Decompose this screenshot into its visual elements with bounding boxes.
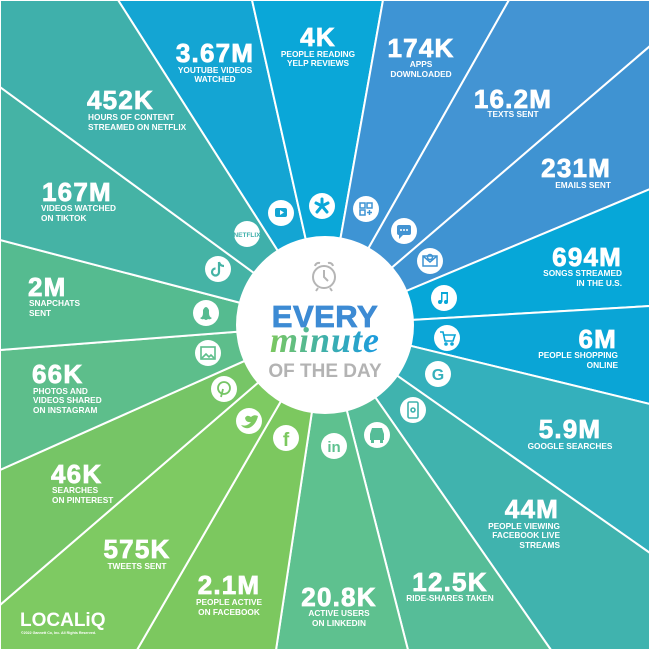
stat: netflix: STREAMED ON NETFLIX	[88, 122, 187, 132]
stat: shopping: 6M	[578, 324, 617, 354]
stat: google	[528, 414, 613, 451]
title: OF THE DAY: OF THE DAY	[268, 361, 382, 382]
icon: email	[423, 254, 437, 266]
stat: instagram: VIDEOS SHARED	[33, 395, 102, 405]
stat: tiktok: 167M	[42, 177, 112, 207]
icon: photo	[201, 347, 215, 359]
stat: netflix: HOURS OF CONTENT	[88, 112, 174, 122]
icons ring	[193, 193, 460, 459]
stat: apps: 174K	[388, 33, 454, 63]
stat: linkedin	[301, 582, 377, 628]
stat: facebook: 2.1M	[198, 570, 260, 600]
stat: apps: DOWNLOADED	[390, 69, 452, 79]
stat: youtube	[176, 38, 254, 84]
stat: apps: APPS	[410, 59, 433, 69]
stat: yelp: 4K	[300, 22, 336, 52]
stat: songs: SONGS STREAMED	[543, 268, 622, 278]
icon: phone	[408, 402, 418, 418]
stat: facebook: PEOPLE ACTIVE	[196, 597, 262, 607]
stat: pinterest: ON PINTEREST	[52, 495, 113, 505]
icon: netflix: NETFLIX	[233, 232, 261, 239]
icon: music	[438, 292, 448, 304]
icon: linkedin: in	[327, 439, 341, 456]
center circle	[236, 236, 414, 414]
stat: snapchat	[28, 272, 80, 318]
stat: yelp	[281, 22, 355, 68]
stat: youtube: 3.67M	[176, 38, 254, 68]
stat: texts: TEXTS SENT	[487, 109, 539, 119]
icon: twitter	[241, 415, 258, 428]
stat: netflix	[87, 85, 187, 132]
stat: youtube: YOUTUBE VIDEOS	[178, 65, 253, 75]
stat: twitter: 575K	[104, 534, 170, 564]
stat: linkedin: 20.8K	[301, 582, 377, 612]
icon: alarm clock	[313, 263, 335, 291]
stat: instagram	[32, 359, 102, 415]
stat: tiktok	[41, 177, 116, 223]
stat: fb live: PEOPLE VIEWING	[488, 521, 560, 531]
stat: google: 5.9M	[539, 414, 601, 444]
stat: google: GOOGLE SEARCHES	[528, 441, 613, 451]
stat: snapchat: SENT	[29, 308, 51, 318]
icon: cart	[440, 332, 455, 345]
stat: youtube: WATCHED	[194, 74, 236, 84]
stat: instagram: 66K	[32, 359, 83, 389]
stat: twitter: TWEETS SENT	[107, 561, 167, 571]
title: EVERY: EVERY	[272, 299, 378, 334]
stat: rideshares: RIDE-SHARES TAKEN	[406, 593, 494, 603]
icon: chat	[397, 225, 411, 239]
stat: songs: 694M	[552, 242, 622, 272]
stat: shopping: PEOPLE SHOPPING	[538, 350, 618, 360]
stat: netflix: 452K	[87, 85, 154, 115]
stat: instagram: ON INSTAGRAM	[33, 405, 97, 415]
stat: songs	[543, 242, 622, 288]
stat: facebook	[196, 570, 262, 617]
icon: google: G	[432, 367, 444, 384]
stat: linkedin: ON LINKEDIN	[312, 618, 366, 628]
icon: apps	[360, 203, 372, 215]
stat: emails: EMAILS SENT	[555, 180, 611, 190]
stat: emails: 231M	[541, 153, 611, 183]
stat: rideshares: 12.5K	[412, 567, 488, 597]
logo: LOCALiQ: ©2022 Gannett Co, Inc. All Rights Reserved.	[21, 631, 96, 635]
stat: texts: 16.2M	[474, 84, 552, 114]
stat: facebook: ON FACEBOOK	[198, 607, 260, 617]
stat: linkedin: ACTIVE USERS	[308, 608, 370, 618]
stat: pinterest	[51, 459, 113, 505]
stat: shopping: ONLINE	[587, 360, 618, 370]
icon: snapchat	[200, 307, 212, 320]
stat: fb live: STREAMS	[519, 540, 560, 550]
stat: fb live: 44M	[505, 494, 559, 524]
stat: fb live: FACEBOOK LIVE	[492, 530, 560, 540]
stat: snapchat: 2M	[28, 272, 67, 302]
stat: yelp: YELP REVIEWS	[287, 58, 350, 68]
title: minute: minute	[270, 320, 380, 360]
stat: shopping	[538, 324, 618, 370]
stat: tiktok: ON TIKTOK	[41, 213, 86, 223]
icon: pinterest	[218, 382, 230, 397]
stat: yelp: PEOPLE READING	[281, 49, 355, 59]
stat: fb live	[488, 494, 560, 550]
stat: pinterest: SEARCHES	[52, 485, 99, 495]
icon: facebook: f	[283, 430, 290, 451]
stat: apps	[388, 33, 454, 79]
icon: tiktok	[212, 262, 224, 276]
stat: pinterest: 46K	[51, 459, 102, 489]
stat: instagram: PHOTOS AND	[33, 386, 88, 396]
icon: car	[370, 428, 384, 443]
stat: snapchat: SNAPCHATS	[29, 298, 80, 308]
icon: youtube	[275, 208, 287, 217]
logo: LOCALiQ: LOCALiQ	[20, 610, 106, 631]
icon: yelp	[316, 199, 328, 212]
stat: songs: IN THE U.S.	[576, 278, 622, 288]
stat: tiktok: VIDEOS WATCHED	[41, 203, 116, 213]
